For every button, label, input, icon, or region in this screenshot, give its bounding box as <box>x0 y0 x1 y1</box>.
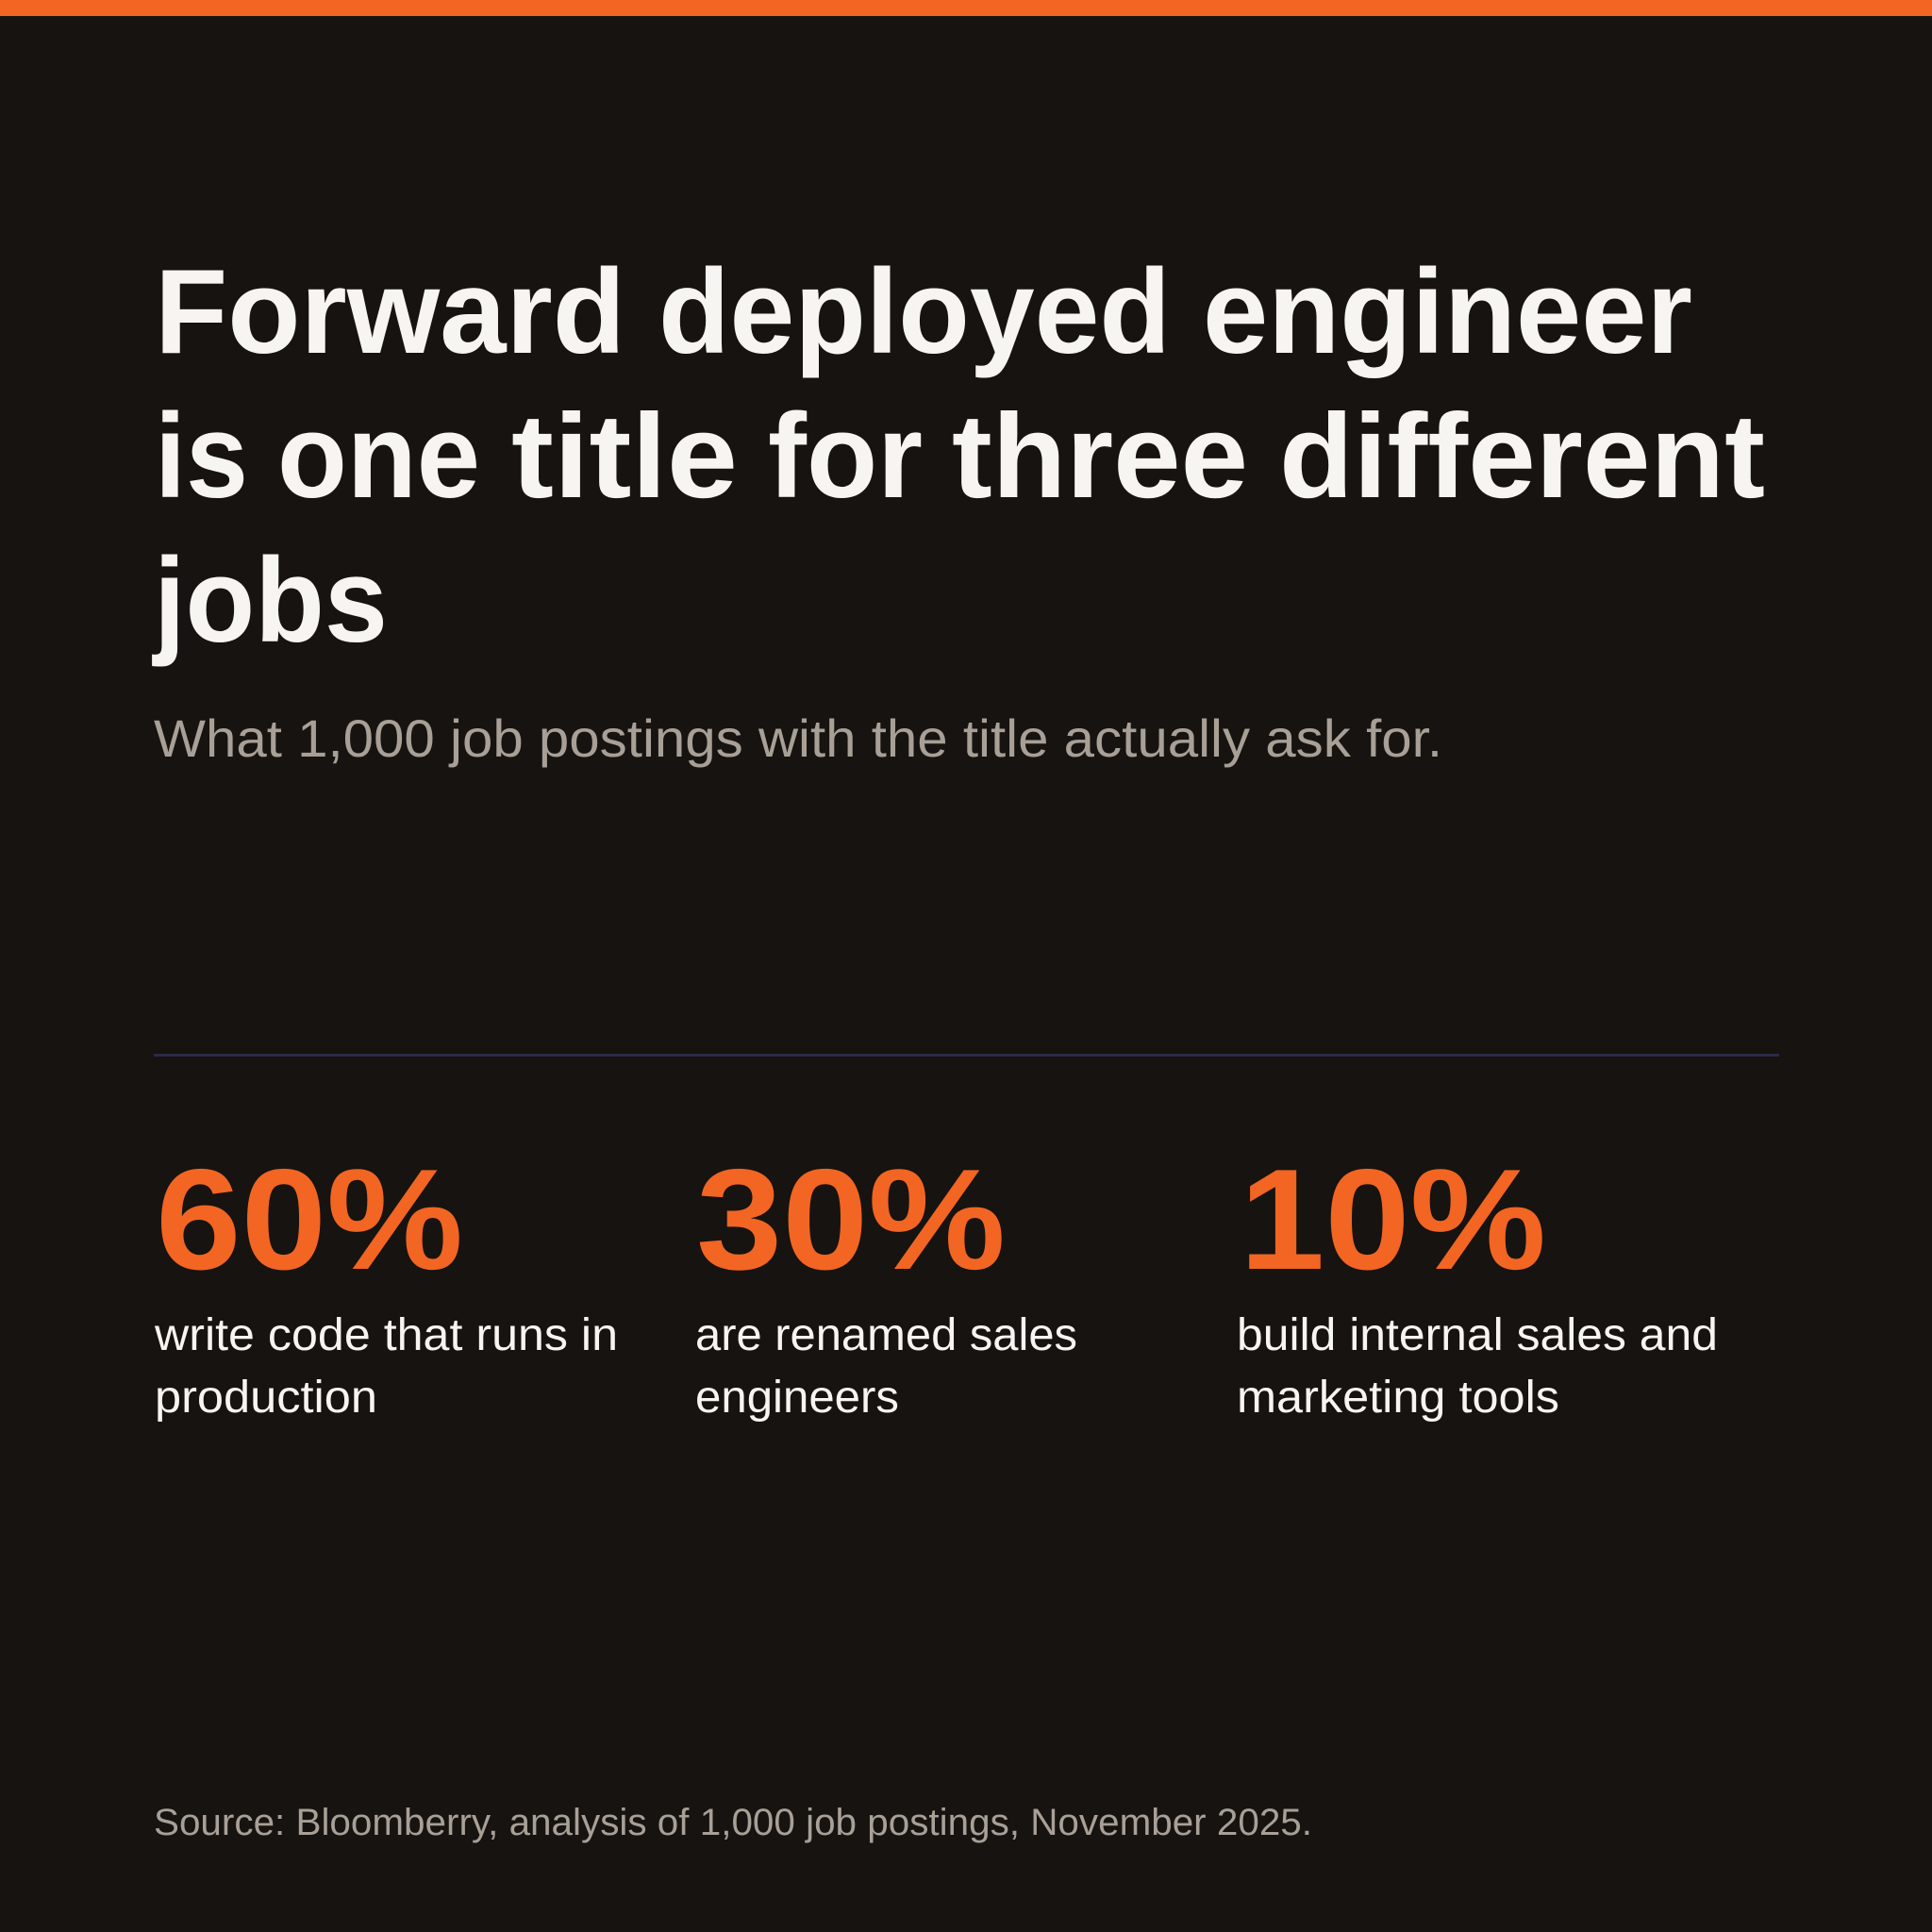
title: deployed <box>658 244 1171 378</box>
title: Forward <box>155 244 625 378</box>
stat: 60%: production <box>155 1373 377 1423</box>
title: title <box>511 389 738 523</box>
stat: 10%: marketing tools <box>1237 1373 1559 1423</box>
title: one <box>277 389 480 523</box>
title: three <box>952 389 1248 523</box>
divider <box>154 1054 1779 1057</box>
stat: 10%: build internal sales and <box>1237 1310 1718 1360</box>
stat: 60%: write code that runs in <box>154 1310 618 1360</box>
stat: 30%: 30% <box>696 1140 1006 1300</box>
title: engineer <box>1203 244 1692 378</box>
stat: 10%: 10% <box>1240 1140 1546 1300</box>
stat: 30%: are renamed sales <box>695 1310 1077 1360</box>
stats row <box>154 1140 1718 1423</box>
title <box>152 244 1765 667</box>
title: different <box>1279 389 1765 523</box>
subtitle: What 1,000 job postings with the title actually ask for. <box>154 708 1442 768</box>
stat: 30% <box>695 1140 1077 1423</box>
title: jobs <box>152 533 388 667</box>
stat: 60% <box>154 1140 618 1423</box>
stat: 10% <box>1237 1140 1718 1423</box>
stat: 60%: 60% <box>156 1140 463 1300</box>
top accent bar <box>0 0 1932 16</box>
title: is <box>155 389 248 523</box>
stat: 30%: engineers <box>695 1373 899 1423</box>
source footnote: Source: Bloomberry, analysis of 1,000 job postings, November 2025. <box>154 1802 1312 1843</box>
title: for <box>768 389 923 523</box>
